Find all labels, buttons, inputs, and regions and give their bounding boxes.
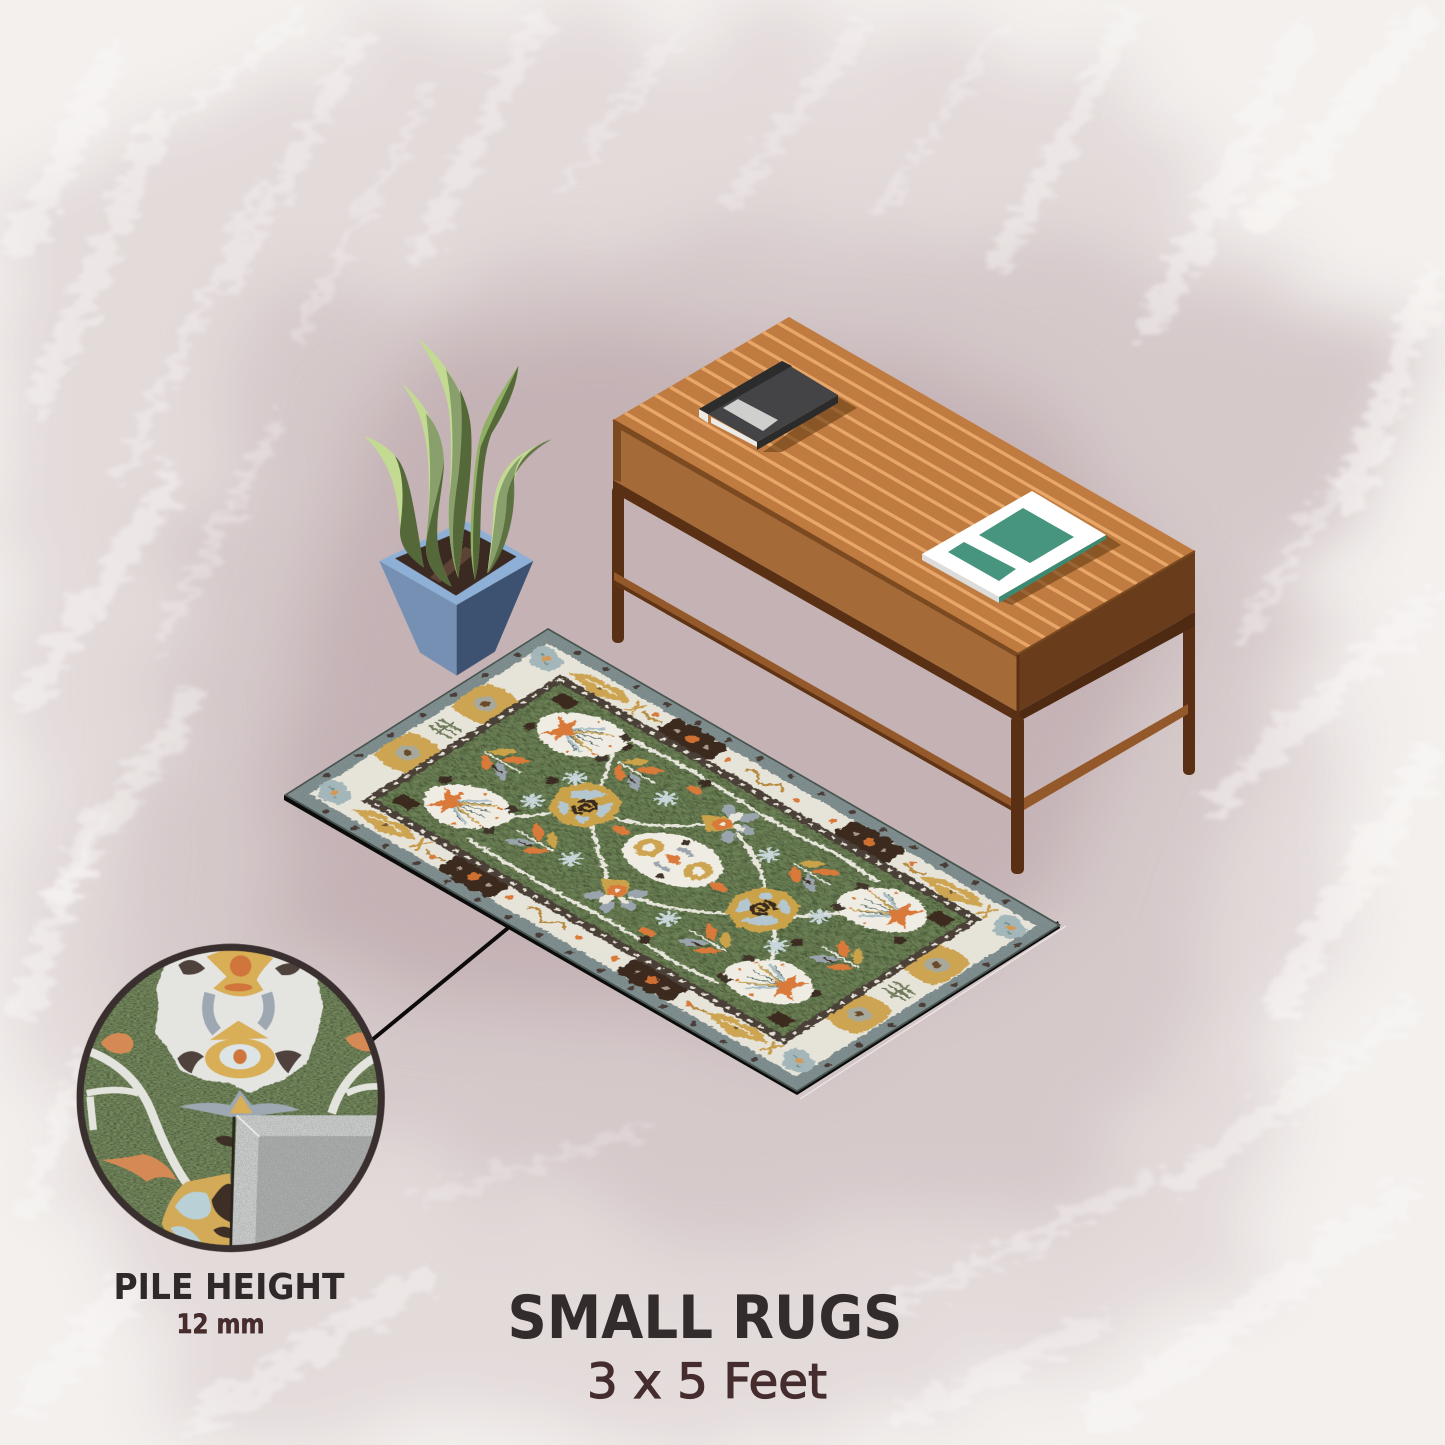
- star sprays: [399, 697, 946, 1023]
- medallions: [397, 693, 953, 1024]
- white vines: [90, 1052, 187, 1183]
- plant leaves: [364, 339, 552, 587]
- label: pile height: PILE HEIGHT: [114, 1267, 345, 1308]
- rug floor highlight: [800, 926, 1066, 1099]
- white medallion close-up: [155, 947, 323, 1093]
- rug outer grey border: [284, 628, 1061, 1092]
- front leg: [1011, 716, 1024, 874]
- table: [612, 317, 1195, 874]
- center oval: [607, 820, 740, 899]
- pile height detail circle: [80, 947, 383, 1253]
- book: [699, 361, 857, 452]
- connector line from rug to detail circle: [372, 928, 508, 1040]
- cream border: [309, 643, 1036, 1077]
- magazine: [922, 491, 1121, 605]
- plant in blue pot: [364, 339, 552, 676]
- green field: [376, 684, 968, 1036]
- detail contents: [87, 947, 383, 1253]
- vines: [456, 730, 894, 993]
- border motifs: [305, 641, 1040, 1079]
- far legs and stretchers: [612, 486, 1195, 812]
- inner chain border: [362, 675, 982, 1045]
- sprigs: [391, 692, 955, 1028]
- folded corner backing: [231, 1115, 383, 1253]
- pot: [379, 521, 533, 676]
- border dots: [291, 632, 1054, 1088]
- title: small rugs: SMALL RUGS: [508, 1283, 902, 1353]
- rug surface: [291, 632, 1054, 1088]
- subtitle: size: 3 x 5 Feet: [587, 1354, 827, 1410]
- gold medallion close-up: [162, 1173, 233, 1250]
- rug thickness edge: [284, 795, 1060, 1095]
- table long side: [613, 420, 1018, 712]
- circle outline: [80, 947, 381, 1249]
- table top with stripes: [613, 317, 1195, 654]
- rug: [284, 628, 1066, 1099]
- green pile: [80, 947, 381, 1249]
- label: 12 mm: 12 mm: [176, 1309, 264, 1340]
- orange petals: [101, 1033, 133, 1054]
- table short side: [1018, 551, 1195, 712]
